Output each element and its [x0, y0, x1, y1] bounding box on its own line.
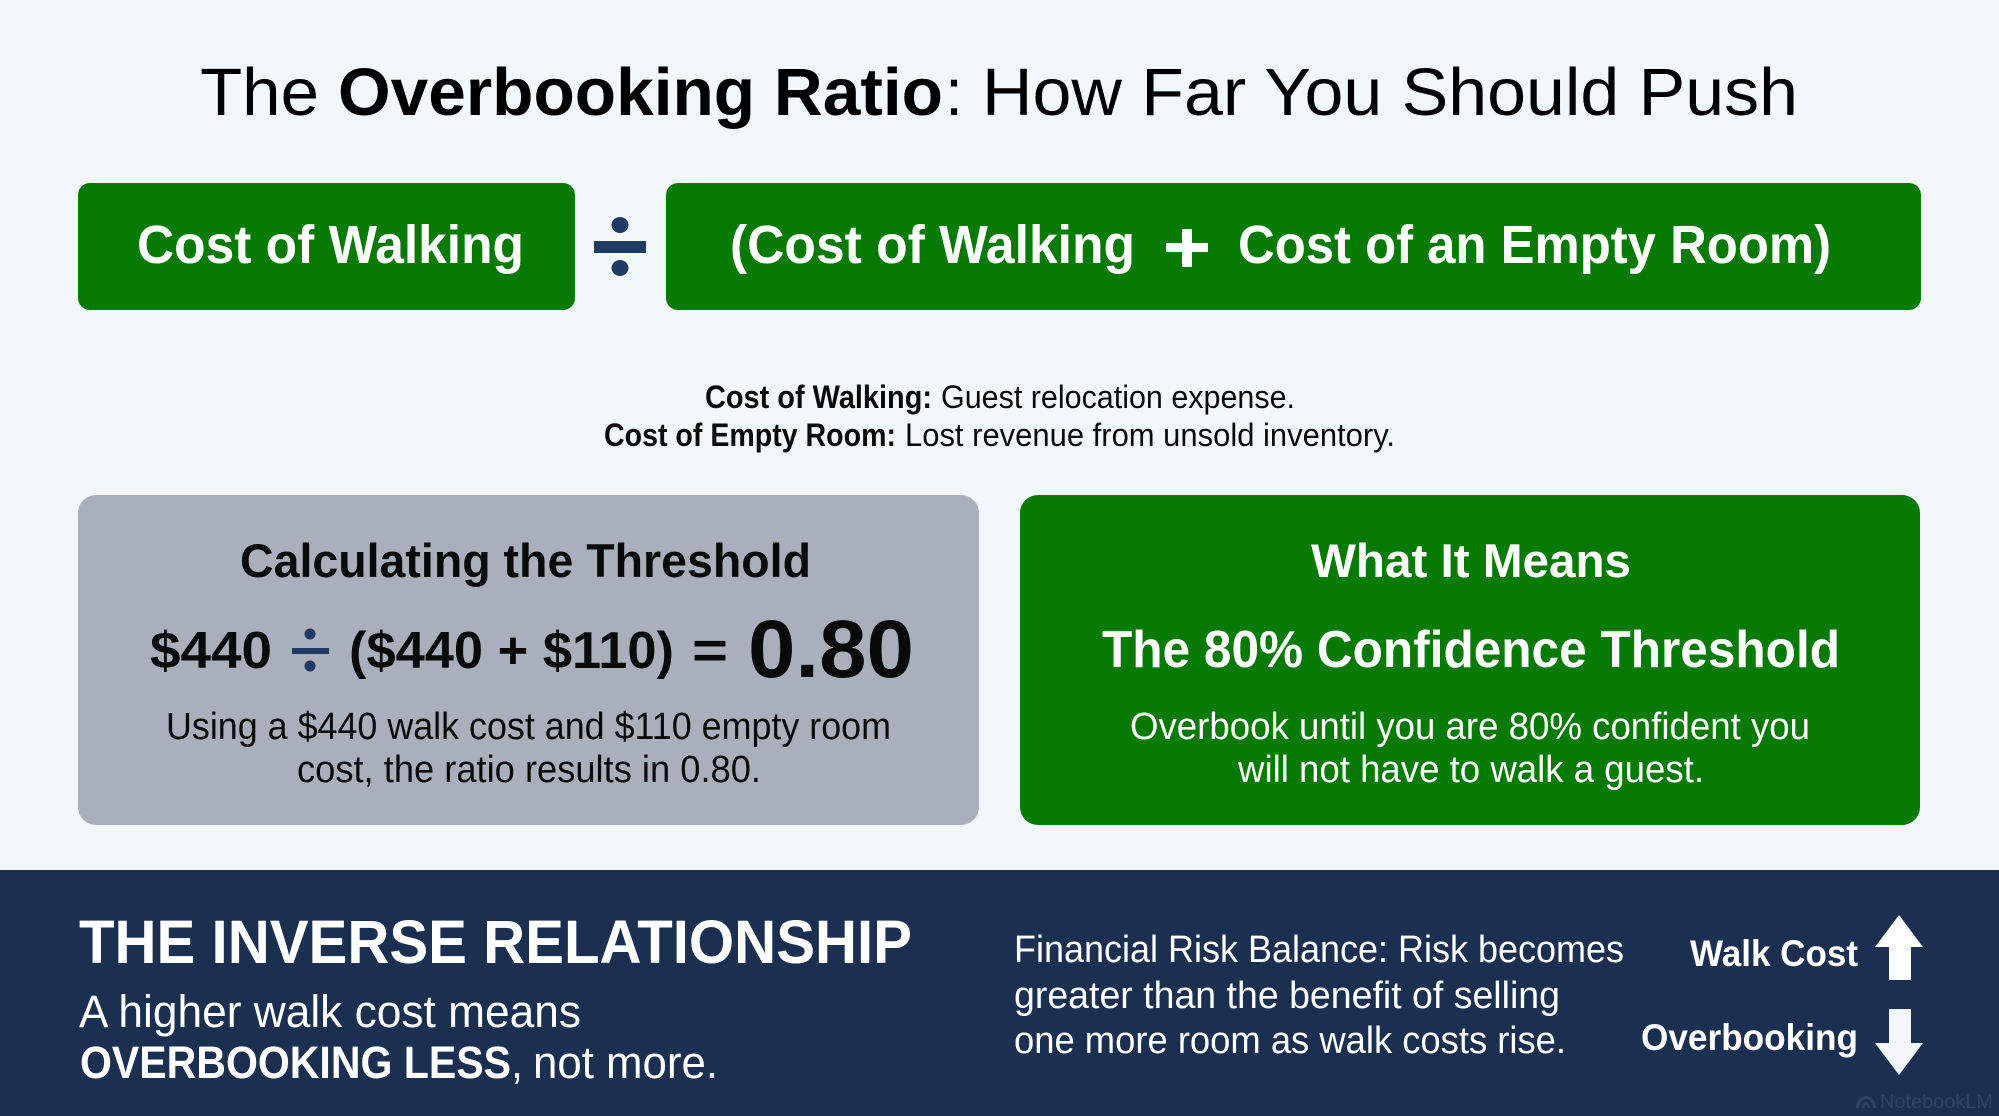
panel heading: Calculating the Threshold [240, 534, 811, 587]
definitions text: Lost revenue from unsold inventory. [905, 417, 1395, 453]
icon: down arrow [1875, 1009, 1923, 1075]
panel description: will not have to walk a guest. [1237, 749, 1704, 791]
icon: plus sign [1166, 229, 1208, 267]
panel: calculating the threshold [78, 495, 979, 825]
band heading: THE INVERSE RELATIONSHIP [79, 908, 912, 976]
title: How Far You Should Push [982, 55, 1798, 130]
walk cost label: Walk Cost [1690, 933, 1858, 974]
financial risk balance text: Financial Risk Balance: Risk becomes [1014, 929, 1624, 971]
overbooking label: Overbooking [1641, 1017, 1858, 1058]
band statement: not more. [533, 1037, 718, 1088]
title: The [200, 55, 319, 130]
confidence threshold statement: The 80% Confidence Threshold [1102, 621, 1840, 679]
panel description [1130, 706, 1810, 791]
band statement [79, 986, 718, 1088]
band statement: A higher walk cost means [79, 986, 581, 1037]
band statement: OVERBOOKING LESS [80, 1037, 511, 1088]
icon: up arrow [1875, 915, 1923, 980]
calculation formula: 0.80 [748, 604, 914, 695]
definitions text: Guest relocation expense. [941, 379, 1295, 415]
formula denominator box [666, 183, 1921, 310]
calculation formula: $440 [150, 622, 272, 680]
panel: inverse relationship band [0, 870, 1999, 1116]
panel description: Using a $440 walk cost and $110 empty room [166, 706, 891, 748]
formula denominator box: Cost of an Empty Room) [1238, 215, 1831, 275]
panel heading: What It Means [1311, 534, 1631, 587]
title [200, 55, 1798, 130]
panel description: Overbook until you are 80% confident you [1130, 706, 1810, 748]
panel: what it means [1020, 495, 1920, 825]
calculation formula: = [692, 622, 728, 680]
financial risk balance text: greater than the benefit of selling [1014, 975, 1560, 1017]
calculation formula [150, 604, 914, 695]
formula numerator box [78, 183, 575, 310]
definitions text: Cost of Empty Room: [604, 417, 896, 453]
title: Overbooking Ratio [338, 55, 943, 130]
financial risk balance text: one more room as walk costs rise. [1014, 1020, 1566, 1062]
icon: division sign [594, 217, 646, 276]
formula denominator box: (Cost of Walking [730, 215, 1135, 275]
formula numerator box: Cost of Walking [137, 215, 524, 275]
watermark: NotebookLM [1880, 1092, 1993, 1113]
title: : [945, 55, 963, 130]
definitions text [604, 379, 1395, 453]
financial risk balance text [1014, 929, 1624, 1062]
band statement: , [511, 1037, 523, 1088]
calculation formula: ($440 + $110) [349, 622, 674, 680]
panel description: cost, the ratio results in 0.80. [297, 749, 761, 791]
definitions text: Cost of Walking: [705, 379, 932, 415]
panel description [166, 706, 891, 791]
